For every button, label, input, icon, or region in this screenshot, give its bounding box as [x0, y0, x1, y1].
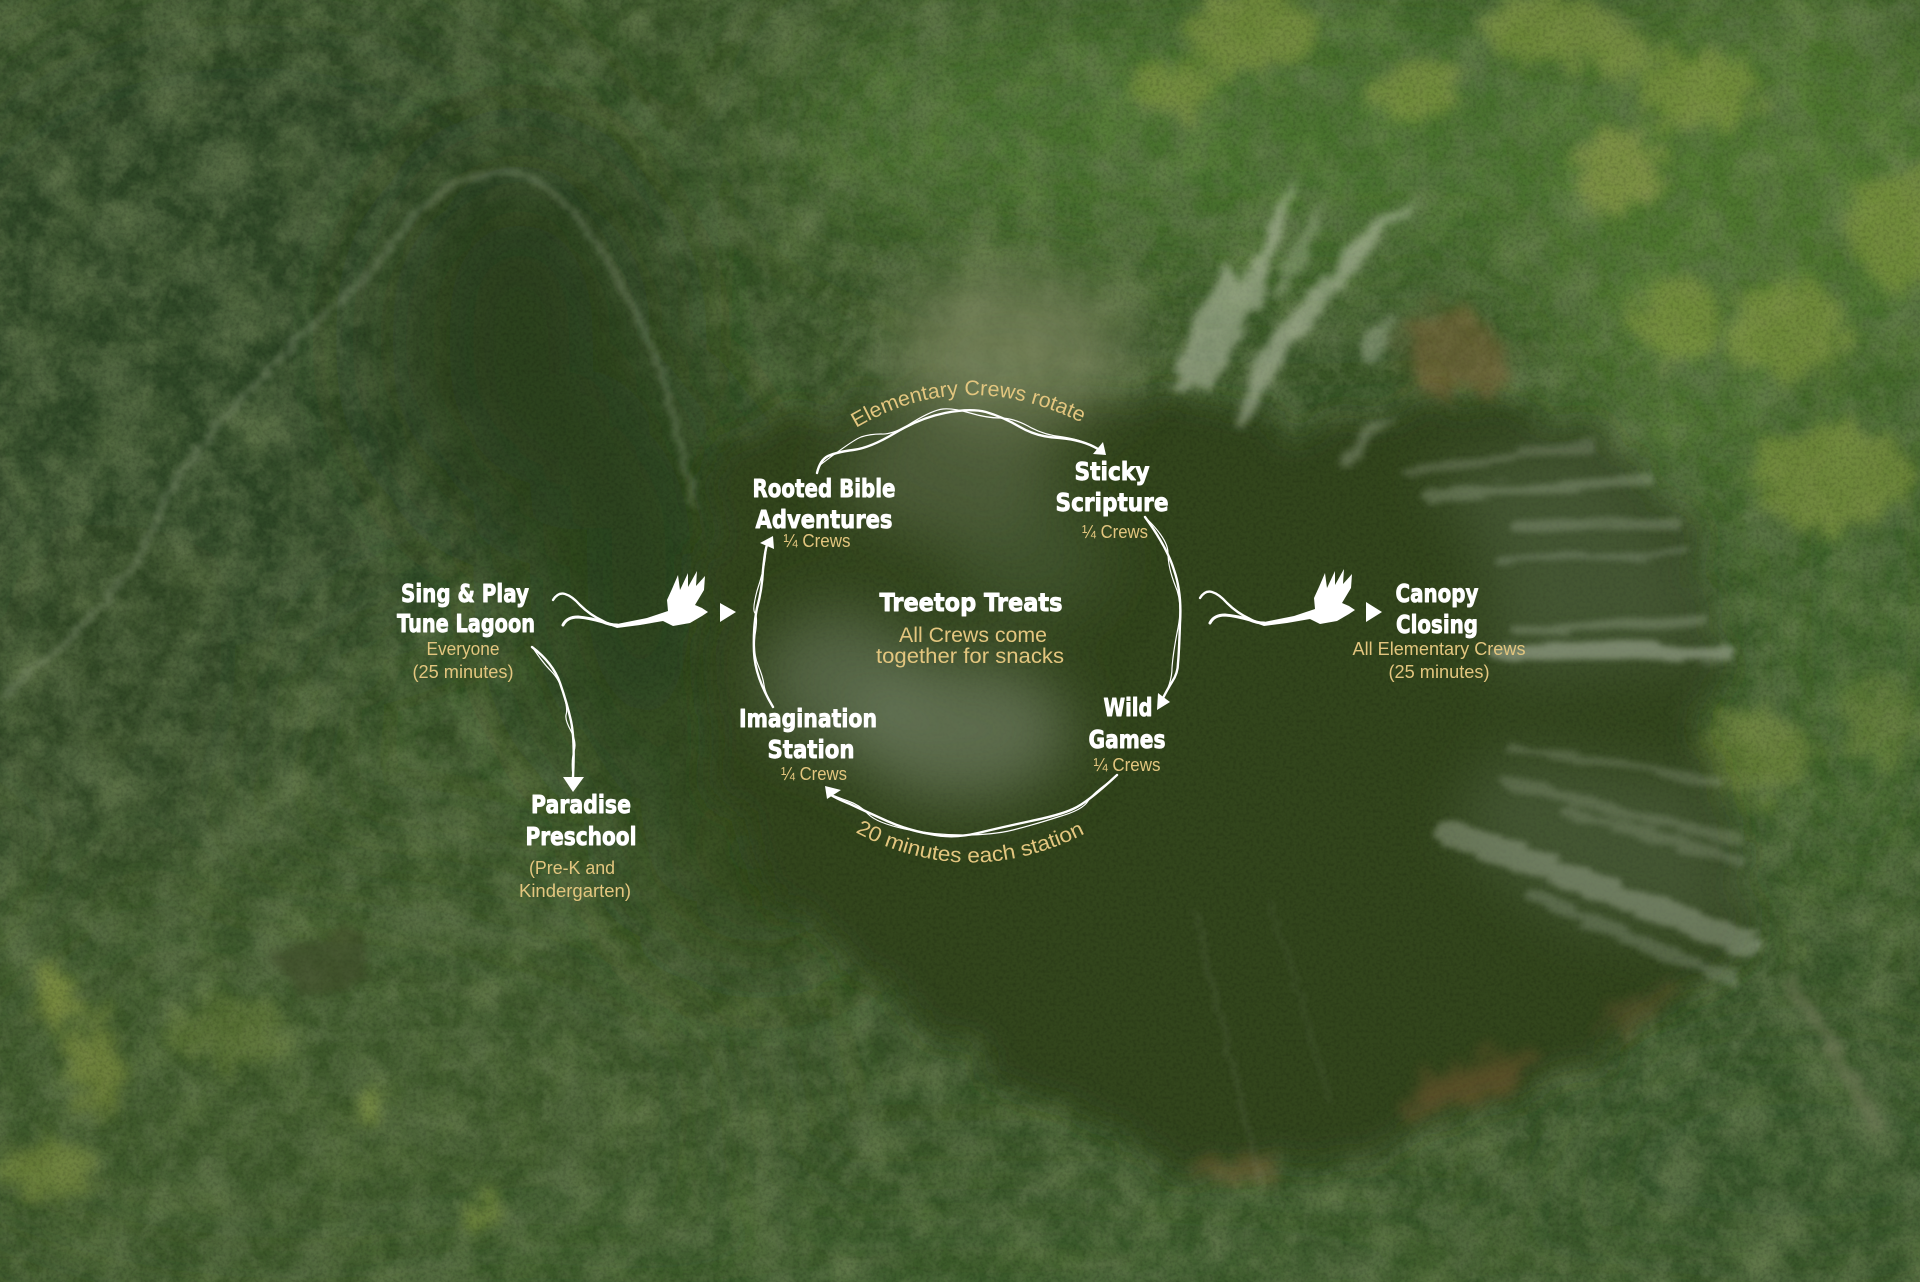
section: Rooted Bible Adventures: [752, 474, 896, 551]
section: Imagination Station: [739, 704, 877, 784]
ridge path: [0, 171, 695, 698]
section: Paradise Preschool: Paradise: [531, 790, 631, 819]
section: Rooted Bible Adventures: ¼ Crews: [784, 531, 850, 551]
section: Paradise Preschool: Kindergarten): [519, 881, 631, 901]
upper waterfalls: [1172, 175, 1426, 470]
waterfall haze: [1420, 430, 1745, 950]
section: Treetop Treats: [876, 588, 1064, 668]
section: Wild Games: [1088, 693, 1166, 775]
curved label: Elementary Crews rotate: Elementary Crews rotate: [850, 380, 1084, 427]
section: Paradise Preschool: Preschool: [526, 822, 636, 851]
section: Wild Games: ¼ Crews: [1094, 755, 1160, 775]
section: Sing & Play Tune Lagoon: Everyone: [426, 639, 500, 659]
arrow: Imagination Station to Rooted Bible: [754, 536, 774, 707]
section: Paradise Preschool: (Pre-K and: [529, 858, 615, 878]
section: Sing & Play Tune Lagoon: (25 minutes): [412, 662, 514, 682]
arrow: Sticky Scripture to Wild Games: [1145, 517, 1180, 710]
section: Canopy Closing: Closing: [1396, 610, 1478, 639]
section: Sticky Scripture: ¼ Crews: [1082, 522, 1148, 542]
section: Sing & Play Tune Lagoon: Tune Lagoon: [397, 609, 535, 638]
orange rock patches: [1195, 305, 1681, 1182]
section: Wild Games: Wild: [1104, 693, 1152, 722]
crater floor: [700, 400, 1750, 1170]
arrow: Rooted Bible to Sticky Scripture: [817, 409, 1106, 473]
lower right rocky shore: [1790, 980, 1880, 1130]
section: Imagination Station: Imagination: [739, 704, 877, 733]
section: Rooted Bible Adventures: Adventures: [756, 505, 892, 534]
section: Canopy Closing: All Elementary Crews: [1352, 639, 1526, 659]
section: Wild Games: Games: [1088, 725, 1166, 754]
waterfall streaks: [1195, 445, 1747, 1180]
section: Sticky Scripture: Sticky: [1074, 457, 1150, 486]
central mist: [760, 270, 1130, 800]
section: Treetop Treats: All Crews come: [899, 624, 1047, 647]
section: Paradise Preschool: [519, 790, 636, 901]
arrow: Sing & Play to Paradise Preschool: [532, 647, 584, 792]
section: Sing & Play Tune Lagoon: Sing & Play: [401, 579, 529, 608]
section: Canopy Closing: Canopy: [1396, 579, 1478, 608]
curved label: 20 minutes each station: 20 minutes each station: [856, 821, 1084, 863]
section: Sticky Scripture: [1056, 457, 1168, 542]
icon: quetzal bird arrow to rotation: [553, 571, 736, 628]
section: Canopy Closing: [1352, 579, 1526, 682]
arrow: Wild Games to Imagination Station: [825, 775, 1117, 836]
section: Canopy Closing: (25 minutes): [1388, 662, 1490, 682]
jungle temple clearing: [270, 925, 370, 1000]
section: Treetop Treats: together for snacks: [876, 645, 1064, 668]
section: Rooted Bible Adventures: Rooted Bible: [752, 474, 896, 503]
icon: quetzal bird arrow to closing: [1200, 569, 1382, 626]
section: Imagination Station: ¼ Crews: [781, 764, 847, 784]
section: Sticky Scripture: Scripture: [1056, 488, 1168, 517]
section: Sing & Play Tune Lagoon: [397, 579, 535, 682]
dark valley inside ridge: [390, 150, 880, 950]
section: Treetop Treats: Treetop Treats: [880, 588, 1062, 617]
section: Imagination Station: Station: [768, 735, 854, 764]
